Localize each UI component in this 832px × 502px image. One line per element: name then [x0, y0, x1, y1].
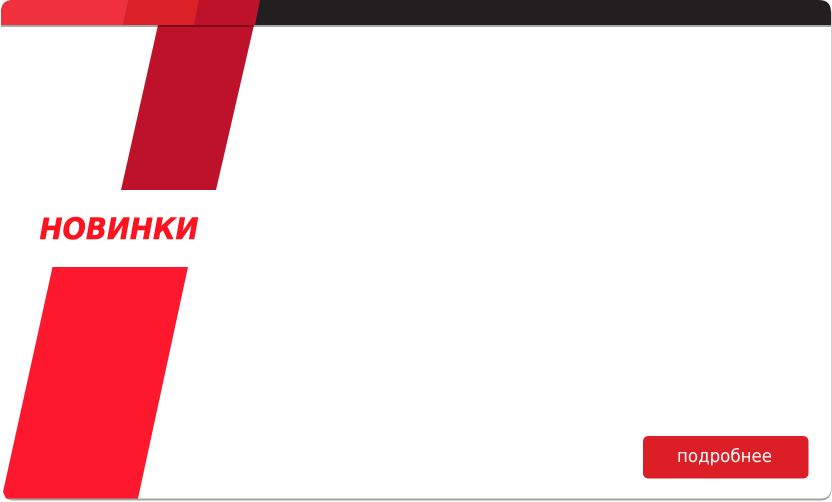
red ribbon — [3, 267, 188, 498]
dark ribbon — [121, 25, 254, 190]
header bar — [0, 0, 832, 27]
title: НОВИНКИ — [40, 212, 198, 246]
button: подробнее — [677, 446, 772, 467]
button — [643, 436, 808, 478]
